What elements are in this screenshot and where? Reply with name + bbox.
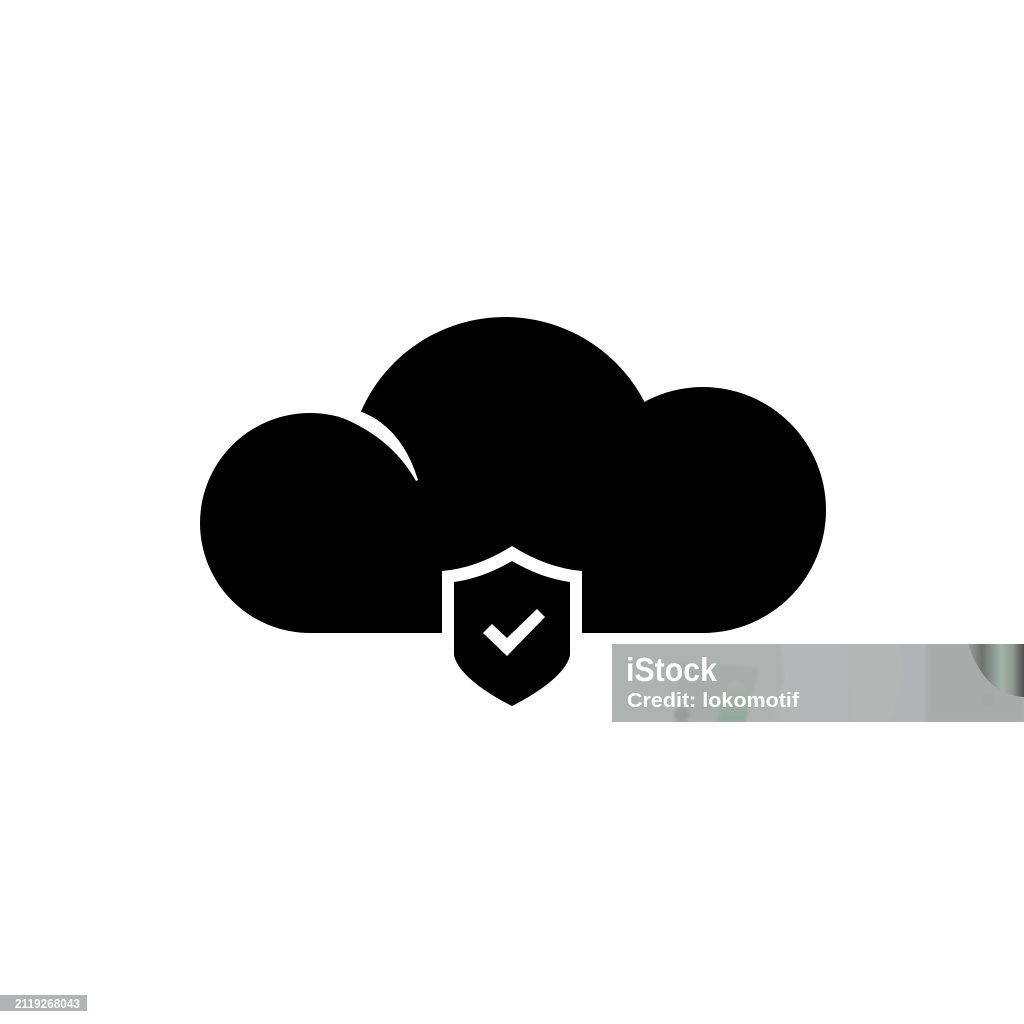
- watermark banner: [612, 644, 1024, 723]
- shield white outline: [442, 546, 582, 720]
- image id label: [0, 995, 87, 1011]
- white crescent between cloud lobes: [335, 405, 418, 481]
- banner texture shapes: [674, 644, 1024, 722]
- icon: cloud with shield: [200, 317, 826, 720]
- id number: 2119268043: [15, 997, 80, 1011]
- id background: [0, 995, 87, 1011]
- banner background: [612, 644, 1024, 722]
- shield body: [454, 561, 570, 706]
- check mark: [483, 609, 545, 656]
- credit text: Credit: lokomotif: [627, 690, 799, 712]
- iStock logo text: iStock: [626, 651, 718, 688]
- cloud silhouette: [200, 317, 826, 633]
- shield with outline and check mark: [442, 546, 582, 720]
